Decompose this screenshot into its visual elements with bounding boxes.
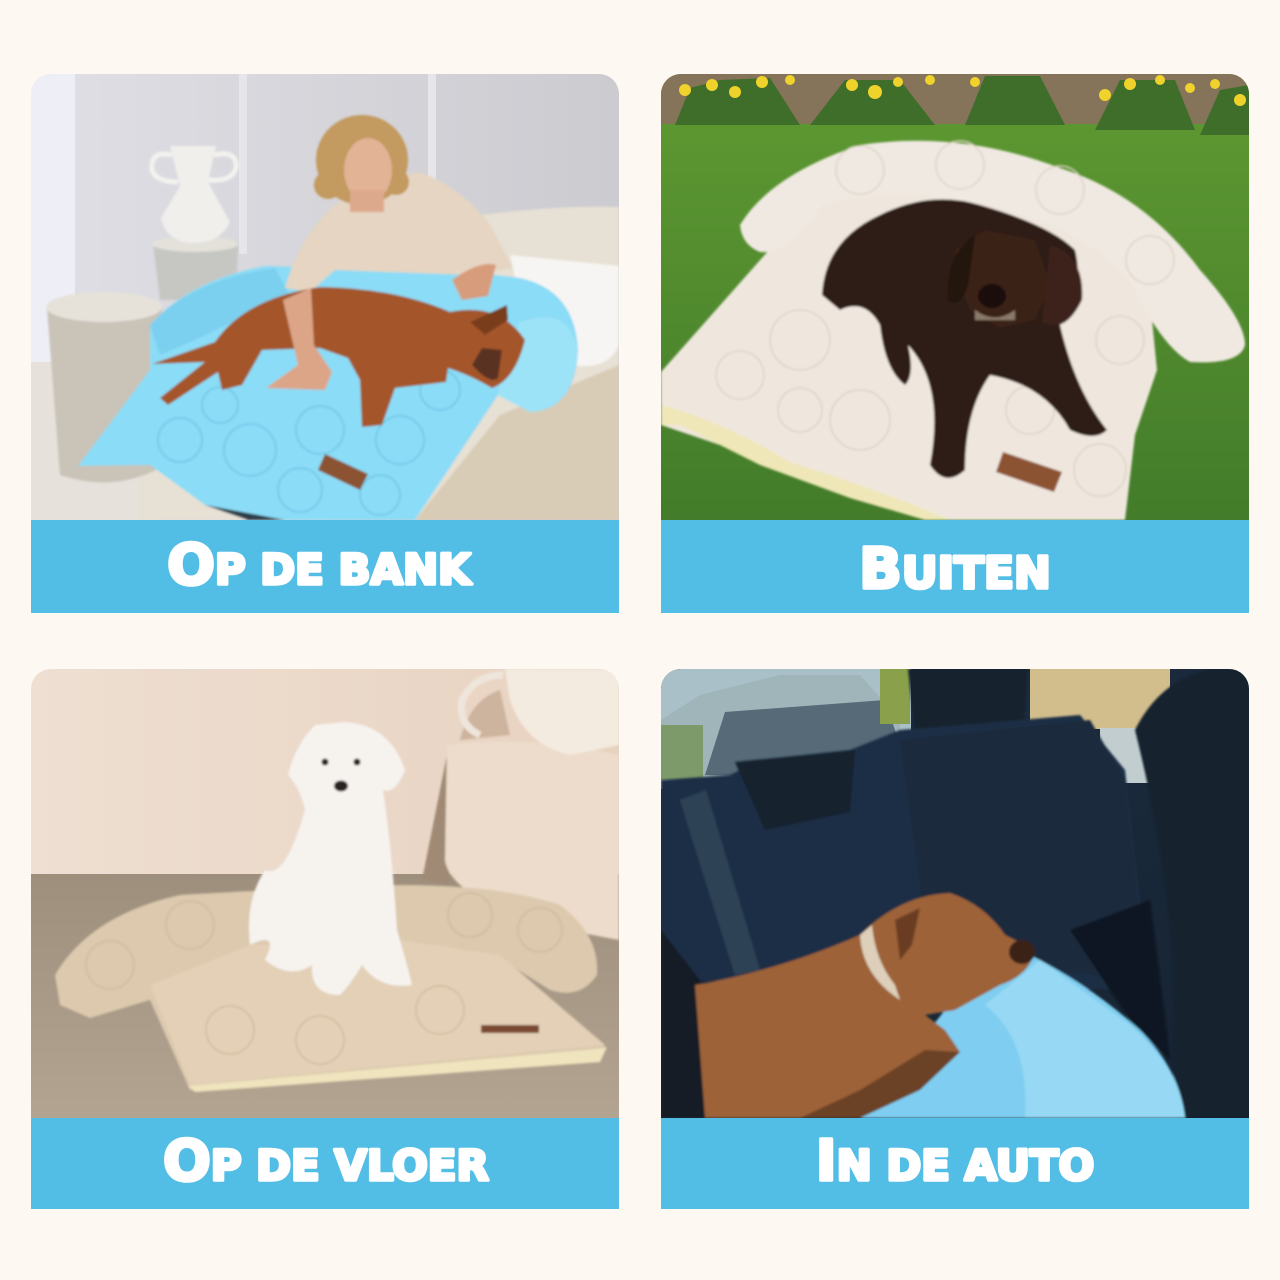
arm xyxy=(266,288,332,390)
patch xyxy=(318,454,368,490)
dog xyxy=(695,893,1035,1118)
panel: op de bank xyxy=(31,74,619,613)
label bar xyxy=(31,1118,619,1209)
panel: op de vloer xyxy=(31,669,619,1209)
blue cushion xyxy=(860,955,1185,1118)
heading: IN DE AUTO xyxy=(816,1129,1094,1194)
label bar xyxy=(31,520,619,613)
blue cushion xyxy=(78,265,578,520)
dog xyxy=(152,287,525,427)
heading: OP DE BANK xyxy=(167,533,472,598)
patch xyxy=(996,452,1062,492)
heading: OP DE VLOER xyxy=(163,1129,489,1194)
patch xyxy=(481,1025,539,1033)
photo: woman and dog on sofa cushion xyxy=(31,74,619,520)
label bar xyxy=(661,1118,1249,1209)
label bar xyxy=(661,520,1249,613)
vase xyxy=(161,146,230,243)
cushion xyxy=(55,885,607,1090)
bolster xyxy=(740,141,1245,362)
photo: white dog on beige cushion xyxy=(31,669,619,1118)
photo: brown dog on blanket on grass xyxy=(661,74,1249,520)
panel: buiten xyxy=(661,74,1249,613)
photo: dog on blue cushion in car xyxy=(661,669,1249,1118)
side tables xyxy=(47,308,162,482)
white dog xyxy=(249,722,412,995)
sofa xyxy=(140,207,619,520)
woman xyxy=(285,172,513,292)
heading: BUITEN xyxy=(859,537,1051,602)
panel: in de auto xyxy=(661,669,1249,1209)
dog xyxy=(822,199,1107,478)
blanket xyxy=(661,170,1157,520)
